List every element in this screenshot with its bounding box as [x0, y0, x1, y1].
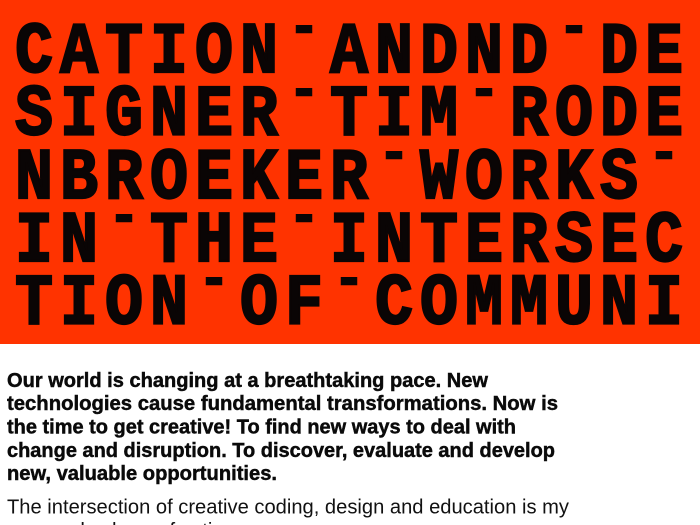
heading: large monospace text: IN [15, 203, 98, 283]
heading: large monospace text: - [197, 246, 231, 318]
heading: large monospace text: - [107, 183, 141, 255]
heading: large monospace text: THE [150, 203, 278, 283]
heading: large monospace text: - [377, 120, 411, 192]
heading: large monospace text: SIGNER [15, 76, 278, 157]
heading: large monospace text: - [332, 246, 366, 318]
text block: regular paragraph: The intersection of creative coding, design and education is my [7, 496, 569, 518]
heading: large monospace text: CATION [15, 14, 278, 94]
heading: large monospace text [15, 0, 683, 346]
heading: large monospace text: - [467, 57, 501, 129]
panel: red banner [0, 0, 700, 346]
heading: large monospace text: COMMUNI [375, 265, 683, 346]
text block: bold intro paragraph: the time to get creative! To find new ways to deal with [7, 416, 516, 438]
heading: large monospace text: NBROEKER [15, 140, 368, 220]
heading: large monospace text: - [647, 120, 681, 192]
heading: large monospace text: ANDND [330, 14, 548, 94]
text block: bold intro paragraph: Our world is changing at a breathtaking pace. New [7, 370, 488, 392]
heading: large monospace text: - [287, 183, 321, 255]
heading: large monospace text: WORKS [420, 140, 638, 220]
heading: large monospace text: - [287, 57, 321, 129]
text block: bold intro paragraph: change and disruption. To discover, evaluate and develop [7, 440, 555, 462]
text block: bold intro paragraph [7, 370, 558, 485]
heading: large monospace text: TIM [330, 76, 458, 157]
heading: large monospace text: DE [600, 14, 683, 94]
heading: large monospace text: TION [15, 265, 188, 346]
text block: bold intro paragraph: technologies cause fundamental transformations. Now is [7, 393, 558, 415]
heading: large monospace text: OF [240, 265, 323, 346]
heading: large monospace text: RODE [510, 76, 683, 157]
text block: bold intro paragraph: new, valuable opportunities. [7, 463, 277, 485]
heading: large monospace text: INTERSEC [330, 203, 683, 283]
